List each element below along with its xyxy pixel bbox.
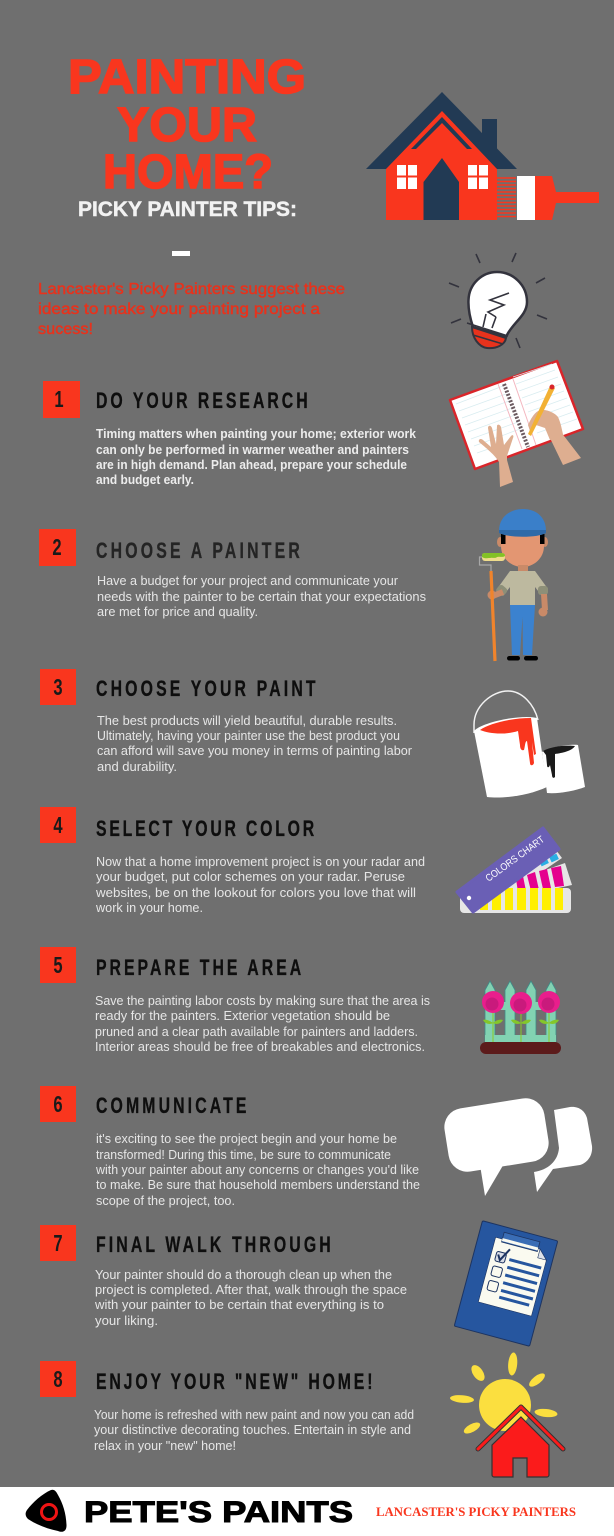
icon: light bulb <box>449 253 547 348</box>
number badge 2 <box>39 529 76 566</box>
icon: sun and red house <box>450 1352 563 1477</box>
body 7 <box>94 1268 407 1328</box>
body 1: can only be performed in warmer weather and painters <box>96 443 409 457</box>
number badge 4: 4 <box>53 813 63 839</box>
body 8: your distinctive decorating touches. Entertain in style and <box>94 1423 411 1437</box>
title: HOME? <box>103 145 273 199</box>
heading 7: FINAL WALK THROUGH <box>96 1234 331 1258</box>
heading 4: SELECT YOUR COLOR <box>96 818 314 842</box>
icon: painter with roller <box>480 509 548 661</box>
panel: tip 8 <box>40 1361 414 1453</box>
footer tagline: LANCASTER'S PICKY PAINTERS <box>376 1505 576 1519</box>
title: YOUR <box>117 98 257 152</box>
body 4: work in your home. <box>95 901 203 915</box>
body 3: Ultimately, having your painter use the best product you <box>97 729 400 743</box>
logo: black rounded triangle with red ring <box>26 1490 67 1532</box>
body 7: Your painter should do a thorough clean up when the <box>95 1268 392 1282</box>
icon: colour chart fan <box>457 828 572 913</box>
body 4 <box>95 855 425 915</box>
number badge 5 <box>40 947 76 983</box>
icon: clipboard checklist <box>454 1221 558 1346</box>
panel: tip 2 <box>39 529 426 619</box>
icon: fence and roses <box>480 981 561 1054</box>
icon: paint buckets <box>474 691 585 798</box>
heading 8: ENJOY YOUR "NEW" HOME! <box>96 1371 372 1395</box>
body 6: with your painter about any concerns or changes you'd like <box>95 1163 419 1177</box>
body 2: are met for price and quality. <box>97 605 258 619</box>
panel: tip 5 <box>40 947 430 1054</box>
number badge 3: 3 <box>53 675 63 701</box>
body 5 <box>95 994 430 1054</box>
heading 6: COMMUNICATE <box>96 1095 247 1119</box>
body 2: Have a budget for your project and communicate your <box>97 574 398 588</box>
panel: tip 4 <box>40 807 425 915</box>
body 2: needs with the painter to be certain that your expectations <box>97 590 426 604</box>
panel: footer <box>0 1487 614 1536</box>
number badge 6: 6 <box>53 1092 63 1118</box>
body 6: transformed! During this time, be sure to communicate <box>96 1148 391 1162</box>
subtitle: PICKY PAINTER TIPS: <box>78 198 297 221</box>
number badge 3 <box>40 669 76 705</box>
number badge 4 <box>40 807 76 843</box>
body 1: and budget early. <box>96 473 194 487</box>
body 8 <box>94 1408 414 1453</box>
panel: tip 3 <box>40 669 412 774</box>
body 5: ready for the painters. Exterior vegetation should be <box>95 1009 390 1023</box>
footer brand name: PETE'S PAINTS <box>84 1496 353 1529</box>
heading 5: PREPARE THE AREA <box>96 957 301 981</box>
intro text: Lancaster's Picky Painters suggest these <box>38 281 345 298</box>
panel: tip 1 <box>43 381 417 487</box>
icon: speech bubbles <box>442 1095 592 1196</box>
icon: house with paint brush <box>366 92 599 220</box>
body 6: it's exciting to see the project begin and your home be <box>96 1132 397 1146</box>
body 5: pruned and a clear path available for painters and ladders. <box>95 1025 418 1039</box>
body 6: scope of the project, too. <box>96 1194 235 1208</box>
short dash <box>172 251 190 256</box>
panel: tip 6 <box>40 1086 420 1208</box>
body 7: project is completed. After that, walk through the space <box>95 1283 407 1297</box>
intro text: ideas to make your painting project a <box>38 301 320 318</box>
body 1: Timing matters when painting your home; exterior work <box>96 427 417 441</box>
body 4: websites, be on the lookout for colors you love that will <box>95 886 416 900</box>
body 6: to make. Be sure that household members understand the <box>96 1178 420 1192</box>
body 5: Interior areas should be free of breakables and electronics. <box>95 1040 425 1054</box>
body 4: Now that a home improvement project is on your radar and <box>96 855 425 869</box>
intro text: sucess! <box>38 321 93 338</box>
heading 3: CHOOSE YOUR PAINT <box>96 678 316 702</box>
body 3: The best products will yield beautiful, durable results. <box>97 714 397 728</box>
body 8: relax in your "new" home! <box>94 1439 236 1453</box>
body 1 <box>96 427 417 487</box>
number badge 2: 2 <box>52 535 62 561</box>
panel: tip 7 <box>40 1225 407 1328</box>
body 8: Your home is refreshed with new paint and now you can add <box>94 1408 414 1422</box>
body 7: with your painter to be certain that everything is to <box>94 1298 384 1312</box>
number badge 7 <box>40 1225 76 1261</box>
number badge 1: 1 <box>54 387 64 413</box>
body 3: and durability. <box>97 760 177 774</box>
intro text <box>38 281 345 338</box>
number badge 7: 7 <box>53 1231 63 1257</box>
body 1: are in high demand. Plan ahead, prepare your schedule <box>96 458 407 472</box>
body 4: your budget, put color schemes on your radar. Peruse <box>96 870 405 884</box>
body 2 <box>97 574 426 619</box>
icon: notebook and hands <box>450 361 583 487</box>
heading 1: DO YOUR RESEARCH <box>96 390 308 414</box>
number badge 1 <box>43 381 80 418</box>
number badge 6 <box>40 1086 76 1122</box>
icon: colour chart fan: COLORS CHART <box>484 834 547 884</box>
title <box>68 50 306 199</box>
body 5: Save the painting labor costs by making sure that the area is <box>95 994 430 1008</box>
number badge 8 <box>40 1361 76 1397</box>
title: PAINTING <box>68 50 306 104</box>
number badge 5: 5 <box>53 953 63 979</box>
body 7: your liking. <box>95 1314 158 1328</box>
body 3 <box>97 714 412 774</box>
number badge 8: 8 <box>53 1367 63 1393</box>
body 6 <box>95 1132 420 1208</box>
body 3: can afford will save you money in terms of painting labor <box>97 744 412 758</box>
heading 2: CHOOSE A PAINTER <box>96 540 300 564</box>
